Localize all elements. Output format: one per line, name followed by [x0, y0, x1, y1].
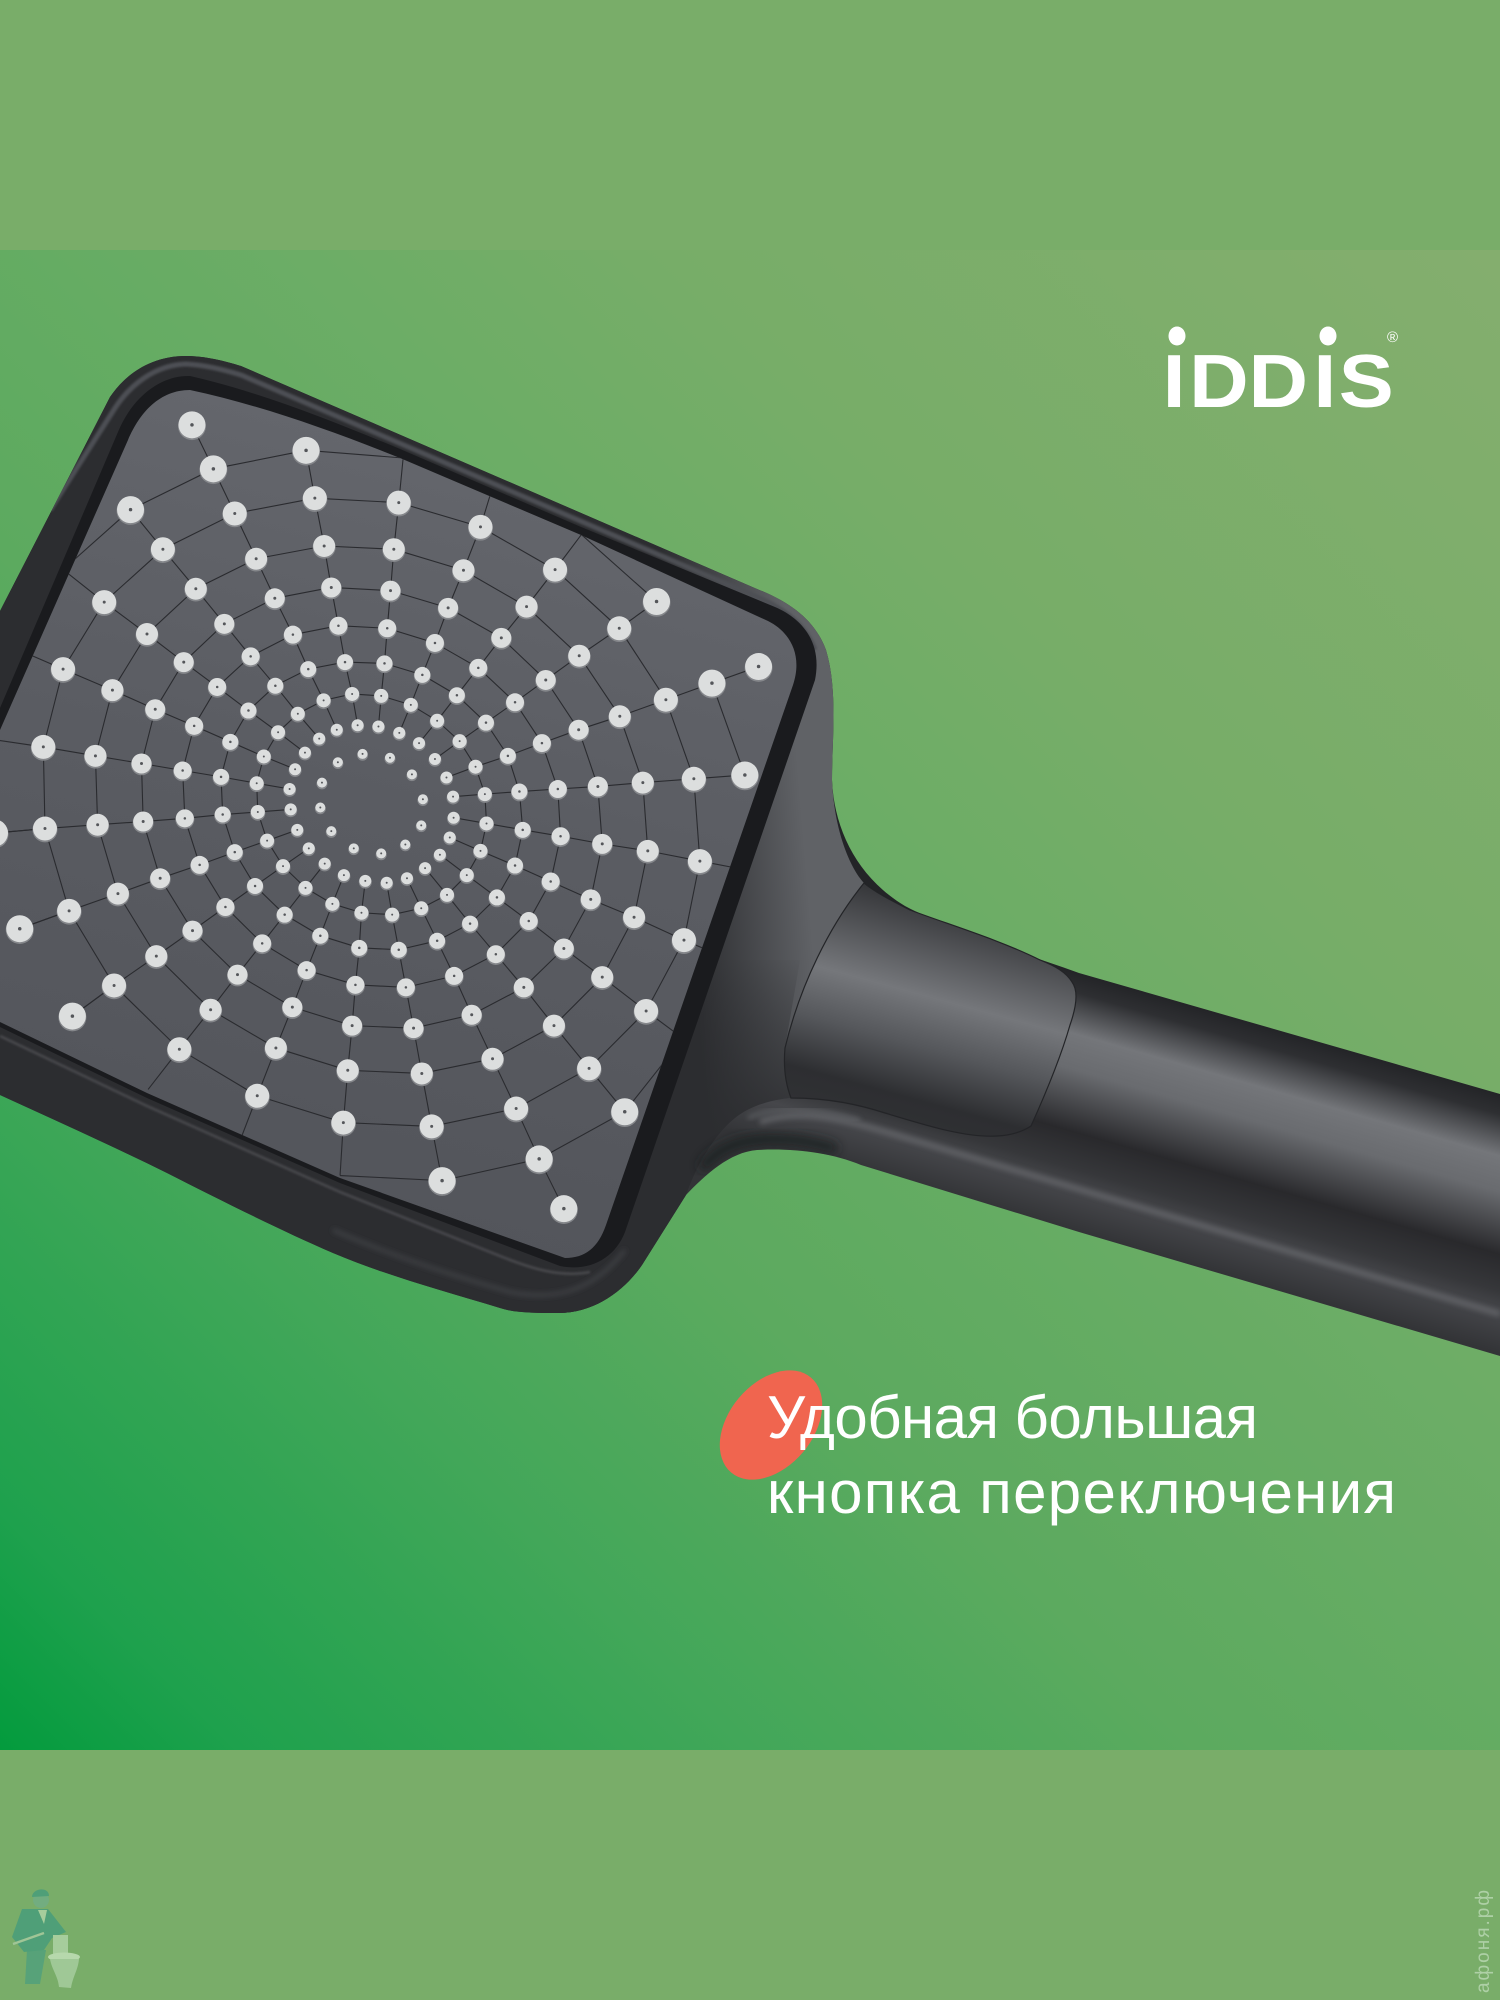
background gradient panel: [0, 250, 1500, 1750]
neck fillet highlight: [748, 1109, 860, 1120]
vertical site watermark: афоня.рф: [1473, 1890, 1494, 1993]
logo first i dot: [1168, 326, 1186, 346]
water nozzles: [0, 425, 759, 1210]
face plate: [0, 390, 796, 1258]
plumber mascot watermark: [12, 1889, 80, 1988]
registered mark: ®: [1387, 329, 1398, 346]
spray face web lines: [0, 425, 759, 1209]
mascot cap: [32, 1889, 49, 1897]
logo second i dot: [1320, 326, 1336, 346]
mascot head: [33, 1892, 49, 1908]
mascot torso and arms: [12, 1909, 66, 1952]
caption text: Удобная большая: [767, 1384, 1258, 1451]
shower head product: [0, 356, 1500, 1356]
caption text: кнопка переключения: [767, 1459, 1396, 1526]
head rim and neck: [0, 356, 864, 1313]
neck underside shade: [520, 960, 800, 1313]
switch button: [784, 883, 1076, 1136]
red accent blob: [699, 1351, 843, 1499]
handle body: [0, 356, 1500, 1356]
top colour band: [0, 0, 1500, 250]
top rim highlight: [50, 364, 815, 650]
toilet tank: [53, 1935, 68, 1955]
handle highlight stripe: [760, 1115, 1500, 1314]
neck underside fillet: [705, 1139, 832, 1165]
mascot hands with wrench: [13, 1933, 44, 1944]
mascot legs: [25, 1950, 46, 1984]
bottom rim lower sheen: [333, 1230, 625, 1295]
bottom colour band: [0, 1750, 1500, 2000]
mascot shirt and tie: [38, 1910, 47, 1924]
logo wordmark: IDDIS: [1163, 339, 1394, 423]
brand logo: [1163, 326, 1398, 423]
bottom rim highlight under groove: [0, 1036, 590, 1274]
toilet bowl: [50, 1959, 79, 1988]
toilet seat: [48, 1952, 80, 1962]
black groove around face plate: [0, 376, 817, 1267]
